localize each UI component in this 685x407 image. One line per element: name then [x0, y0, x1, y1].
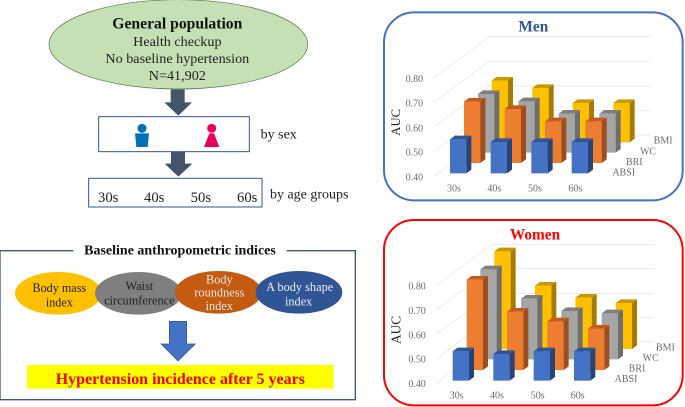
y axis labels: 0.50 [406, 148, 423, 159]
bar chart: men AUC [450, 77, 635, 173]
box: age groups: 50s [191, 190, 211, 206]
outcome banner [27, 365, 334, 389]
population ellipse: Health checkup [133, 34, 222, 50]
series labels: WC [643, 353, 659, 364]
series: WC [478, 90, 621, 153]
series: BMI [492, 77, 635, 142]
ellipse: body roundness index [175, 271, 262, 314]
series: BRI [467, 276, 609, 370]
y axis labels [408, 282, 426, 390]
women title: Women [510, 226, 561, 243]
arrow: indices to outcome [161, 321, 195, 361]
x axis labels: 60s [568, 184, 582, 195]
series: ABSI [450, 136, 593, 173]
population ellipse: N=41,902 [149, 68, 206, 84]
y axis labels [406, 74, 423, 183]
series labels [615, 342, 675, 385]
label: by sex: by sex [261, 127, 297, 142]
series: BRI [464, 98, 607, 163]
arrow: population to sex [164, 89, 192, 116]
men title: Men [518, 19, 549, 36]
ellipse: a body shape index: A body shape [266, 280, 334, 294]
ellipse: body roundness index: index [206, 299, 234, 313]
ellipse: body mass index [15, 272, 102, 315]
series labels: BMI [654, 136, 673, 147]
y axis title: AUC [389, 109, 403, 136]
y axis labels: 0.60 [406, 123, 423, 134]
ellipse: body roundness index: Body [206, 272, 234, 286]
population ellipse [49, 0, 308, 89]
population ellipse: No baseline hypertension [105, 51, 249, 67]
ellipse: waist circumference: circumference [104, 294, 175, 308]
y axis labels: 0.50 [408, 355, 426, 366]
x axis labels: 50s [531, 390, 545, 401]
y axis labels: 0.80 [408, 282, 426, 293]
label: by age groups: by age groups [270, 188, 348, 203]
series: ABSI [453, 348, 595, 381]
population ellipse: General population [112, 15, 243, 32]
x axis labels [450, 390, 585, 401]
ellipse: body mass index: index [46, 296, 73, 310]
x axis labels: 30s [450, 390, 464, 401]
ellipse: waist circumference: Waist [125, 279, 154, 293]
ellipse: a body shape index: index [285, 295, 313, 309]
panel: men [384, 12, 683, 200]
y axis title: AUC [389, 316, 404, 344]
series labels: BRI [626, 157, 643, 168]
outcome banner: Hypertension incidence after 5 years [56, 371, 305, 388]
x axis labels: 30s [447, 184, 461, 195]
box: age groups: 30s [98, 190, 119, 206]
series labels [612, 136, 673, 178]
ellipse: body mass index: Body mass [32, 281, 86, 295]
y axis labels: 0.70 [406, 99, 423, 110]
y axis labels: 0.60 [408, 330, 426, 341]
y axis labels: 0.70 [408, 306, 426, 317]
series labels: ABSI [612, 167, 635, 178]
ellipse: a body shape index [256, 271, 342, 314]
box: by sex [99, 117, 249, 152]
series labels: BRI [629, 363, 645, 374]
arrow: sex to age groups [165, 152, 192, 177]
series labels: WC [640, 146, 656, 157]
box: age groups: 60s [237, 190, 258, 206]
box: age groups [89, 178, 262, 207]
x axis labels: 60s [571, 390, 585, 401]
x axis labels: 50s [528, 184, 542, 195]
ellipse: body roundness index: roundness [194, 286, 245, 300]
box: age groups: 40s [144, 190, 165, 206]
x axis labels [447, 184, 582, 195]
flow diagram: study population [49, 0, 348, 207]
bar chart: women AUC [453, 248, 637, 381]
ellipse: waist circumference [95, 272, 182, 315]
y axis labels: 0.80 [406, 74, 423, 85]
y axis labels: 0.40 [408, 379, 426, 390]
series labels: ABSI [615, 374, 637, 385]
series labels: BMI [656, 342, 675, 353]
panel heading: Baseline anthropometric indices [84, 243, 276, 258]
x axis labels: 40s [487, 184, 501, 195]
series: BMI [494, 248, 637, 349]
icon: woman [204, 124, 219, 147]
series: WC [480, 266, 623, 359]
x axis labels: 40s [490, 390, 504, 401]
y axis labels: 0.40 [406, 172, 423, 183]
icon: man [135, 124, 149, 147]
panel: baseline anthropometric indices [0, 243, 355, 400]
panel: women [384, 220, 683, 405]
